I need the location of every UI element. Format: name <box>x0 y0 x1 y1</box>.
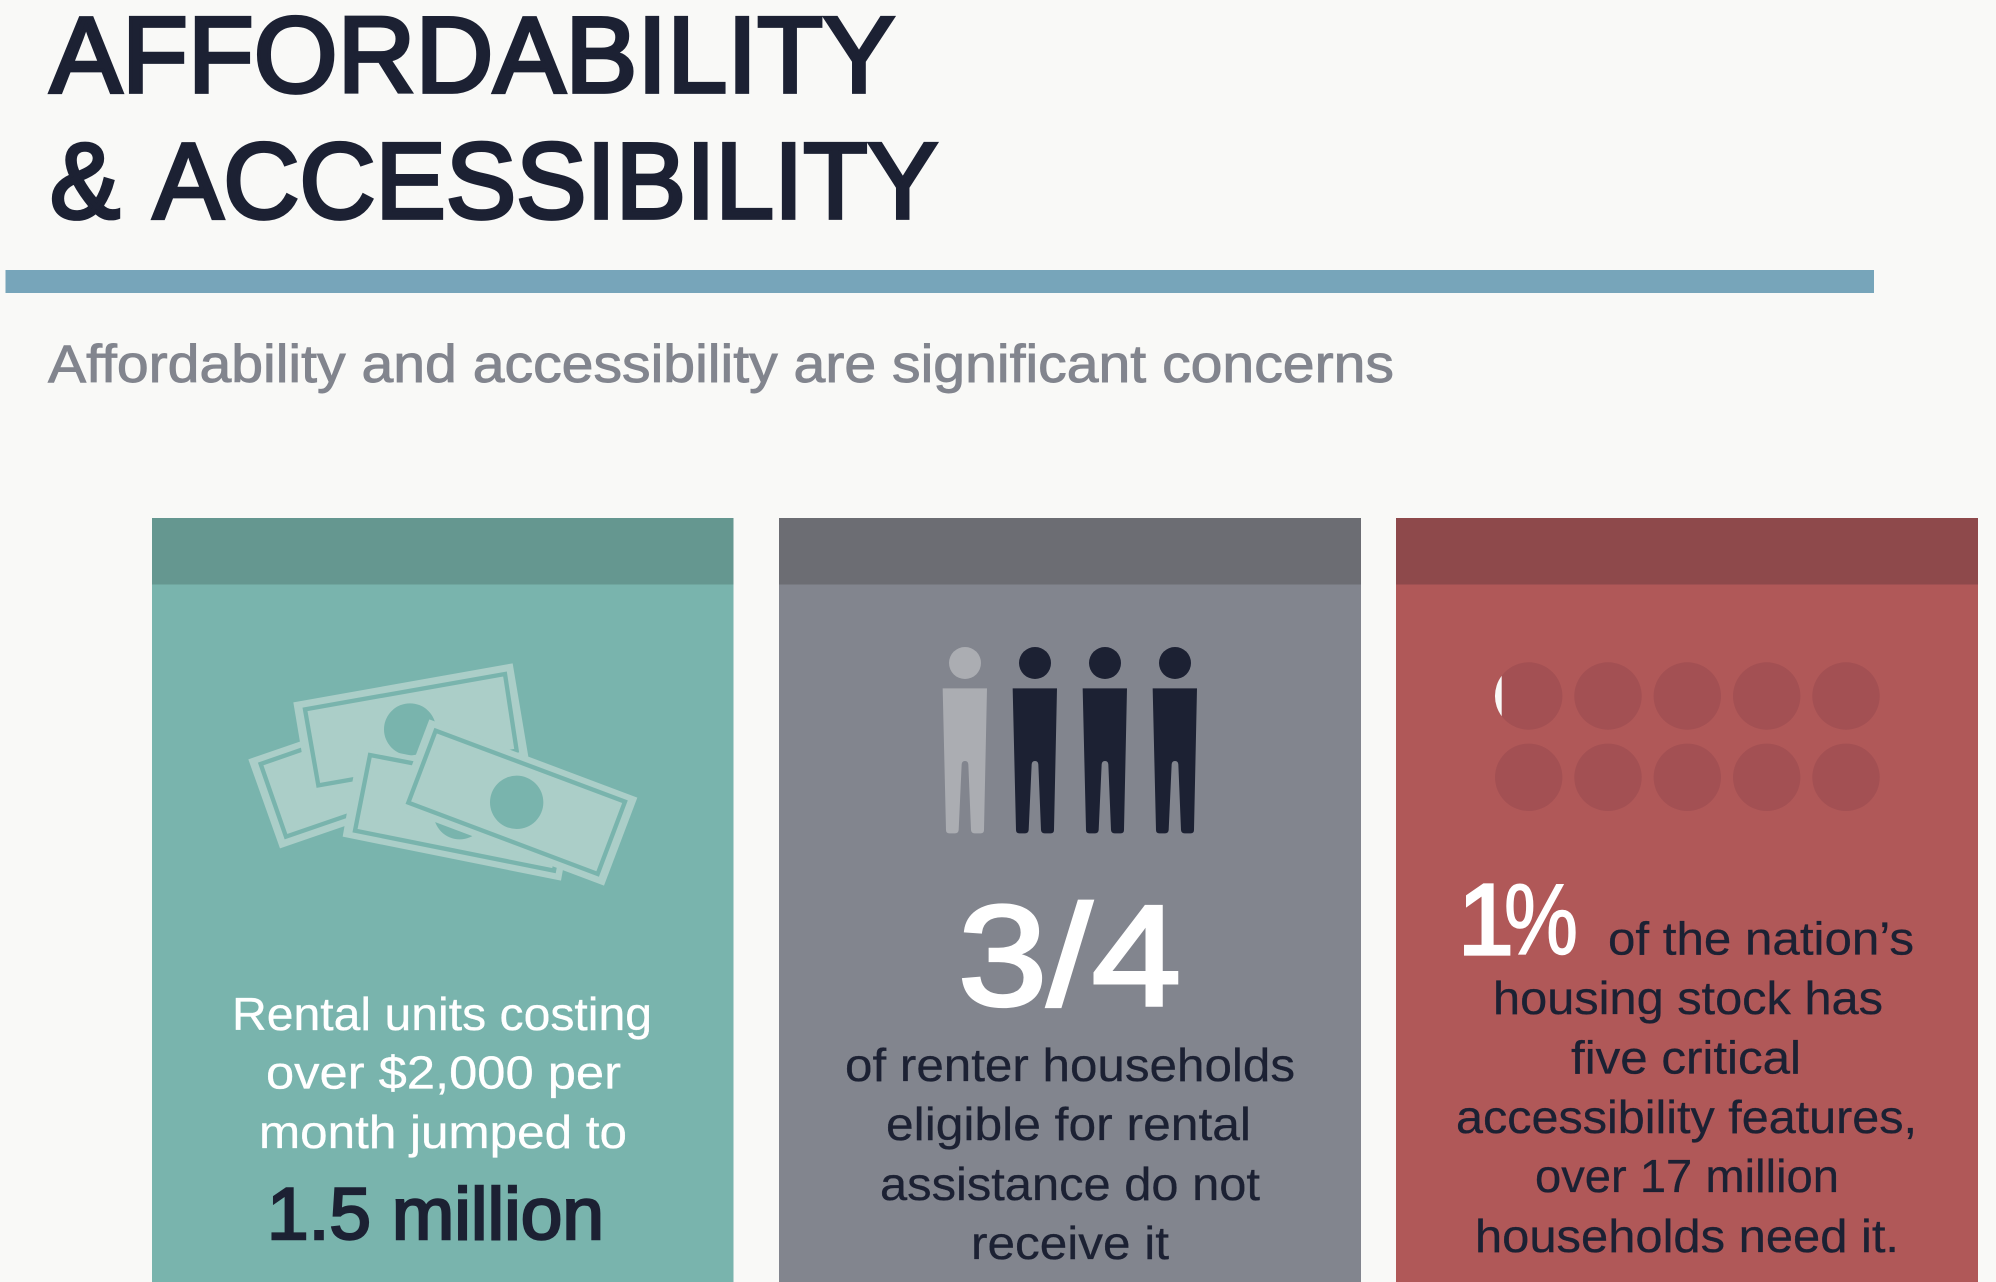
text: housing stock description: over 17 million <box>1535 1150 1839 1202</box>
panel header: accessibility <box>1396 518 1978 584</box>
text: renter households description <box>845 1039 1295 1269</box>
icon: light person <box>943 647 987 833</box>
text: housing stock description: housing stock has <box>1493 972 1883 1024</box>
title <box>50 0 938 241</box>
icon: money bills <box>248 663 637 886</box>
text: housing stock description: accessibility features, <box>1456 1091 1917 1143</box>
text: rental units description: over $2,000 per <box>266 1046 621 1098</box>
icon: dark person 3 <box>1153 647 1197 833</box>
text: housing stock description: five critical <box>1571 1032 1801 1084</box>
panel: rental costs <box>152 518 734 1282</box>
text: housing stock description: households need it. <box>1475 1210 1899 1262</box>
icon: dark person 1 <box>1013 647 1057 833</box>
icon: white sliver <box>1495 676 1502 716</box>
title: & <box>50 120 120 241</box>
panel: rental assistance <box>779 518 1361 1282</box>
title: ACCESSIBILITY <box>153 120 938 241</box>
text: renter households description: of renter households <box>845 1039 1295 1091</box>
text: housing stock description <box>1456 912 1917 1262</box>
text: renter households description: receive it <box>971 1217 1169 1269</box>
panel: accessibility <box>1396 518 1978 1282</box>
statistic: 3/4: 3/4 <box>958 877 1181 1036</box>
icon: dark person 2 <box>1083 647 1127 833</box>
statistic: 1%: 1 <box>1458 864 1514 976</box>
text: rental units description: month jumped to <box>259 1106 627 1158</box>
panel header: rental assistance <box>779 518 1361 584</box>
subtitle: Affordability and accessibility are significant concerns <box>48 335 1394 394</box>
panel header: rental costs <box>152 518 734 584</box>
statistic: 1.5 million: 1.5 million <box>267 1174 604 1255</box>
text: renter households description: assistance do not <box>880 1158 1260 1210</box>
icon: four people, one highlighted <box>943 647 1197 833</box>
text: rental units description: Rental units costing <box>232 988 652 1040</box>
text: renter households description: eligible for rental <box>886 1098 1251 1150</box>
text: rental units description <box>232 988 652 1158</box>
icon: ten dots, one percent highlighted <box>1495 662 1880 811</box>
statistic: 1% <box>1458 864 1578 976</box>
statistic: 1%: % <box>1504 864 1578 976</box>
text: housing stock description: of the nation’s <box>1608 912 1914 964</box>
heading underline bar <box>6 270 1874 293</box>
